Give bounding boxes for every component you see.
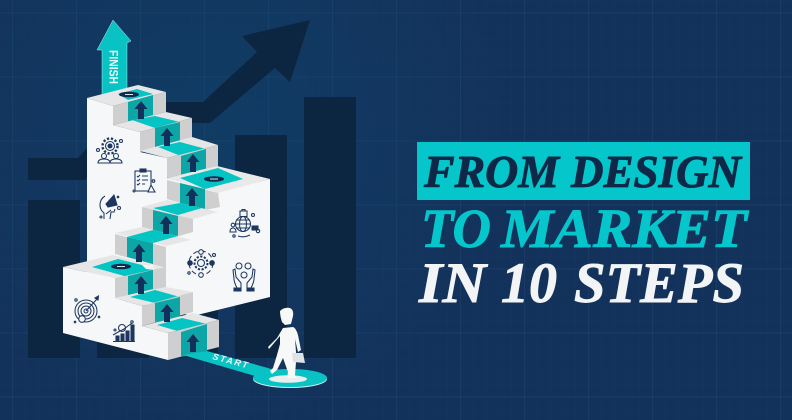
landing badges [111,92,224,269]
title: FROM [423,146,561,197]
icon: clipboard checklist [133,169,155,192]
icon: target with dart [74,296,100,323]
upper white wall [87,98,270,316]
icon: growth chart [113,321,135,342]
staircase structure [63,85,270,360]
lower white wall [63,267,168,360]
lower flight of steps [63,255,219,360]
title: MARKET [500,198,750,259]
icon: globe with team [230,210,260,237]
background bar chart with rising trend arrow [28,20,356,358]
start path: START [211,351,250,371]
icon: hands holding coins [233,263,255,291]
icon: head with megaphone [100,195,120,219]
title [417,142,750,315]
top flight of steps [87,85,218,178]
icon: gear orbit [188,250,216,277]
businessman walking [268,308,305,378]
title: 10 [501,252,557,315]
title: TO [421,198,491,259]
middle landing and flight [115,166,270,268]
start path [183,351,327,388]
title highlight box [417,142,750,200]
title: STEPS [574,252,744,315]
finish arrow: FINISH [106,50,118,84]
finish arrow [97,20,131,97]
step arrows [132,101,200,352]
title: DESIGN [570,146,743,197]
icon: gear with team [96,138,122,163]
title: IN [418,252,488,315]
